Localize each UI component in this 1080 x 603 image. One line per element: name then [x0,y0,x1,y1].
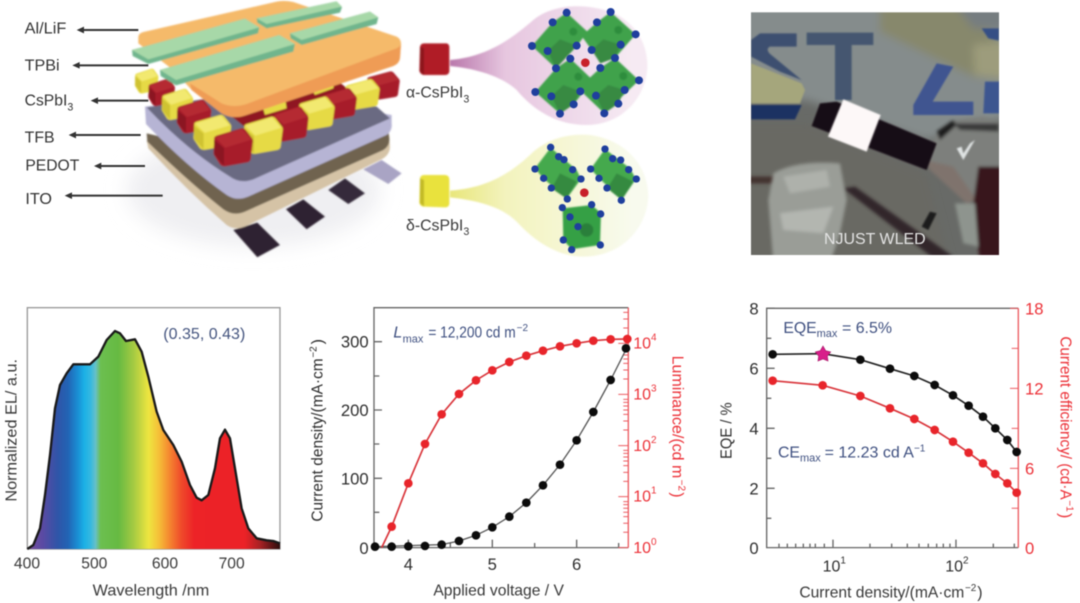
red luminance series [382,335,632,548]
ITO layer [147,135,390,228]
photo dark strip [812,102,937,170]
delta phase bubble [406,135,648,257]
label: ITO: ITO [25,191,52,208]
label: delta CsPbI3: δ-CsPbI [406,217,463,234]
right tick labels: 10 [633,387,651,404]
photo label: NJUST WLED [824,231,926,248]
x tick labels: 6 [572,555,581,574]
ticks [374,342,619,548]
right tick labels: 12 [1025,379,1043,398]
right tick labels: 3 [651,384,657,395]
annotation CEmax: max [800,452,821,464]
coordinates label: (0.35, 0.43) [163,326,245,343]
left tick labels [341,333,369,558]
left tick labels: 2 [749,480,759,499]
TFB layer [145,93,392,199]
annotation CEmax [778,444,926,464]
label: CsPbI3: CsPbI [25,93,67,110]
x tick labels: 600 [152,555,178,572]
x tick labels: 700 [219,555,245,572]
x tick labels: 10 [945,559,963,576]
photo dark cable lines [747,177,953,263]
delta center atom [580,188,589,197]
annotation CEmax: CE [778,444,800,461]
x tick labels: 1 [840,556,846,567]
x tick labels [823,556,969,576]
x axis title: Current density/(mA·cm [799,584,964,601]
photo glowing pixel [828,99,881,152]
left tick labels [749,300,759,558]
right axis title: ) [1057,513,1074,518]
red CE series [768,376,1021,497]
x tick labels [14,555,245,572]
Al/LiF electrode [138,1,401,117]
TPBi strips [132,1,378,85]
alpha octahedra [532,12,639,114]
left tick labels: 0 [359,539,369,558]
delta cube [419,175,449,207]
star marker at EQE max [815,346,831,361]
right tick labels: 10 [633,489,651,506]
label: Al/LiF: Al/LiF [25,21,67,38]
right axis title: −1 [1064,500,1075,512]
right tick labels: 4 [651,332,657,343]
PEDOT layer [147,130,389,214]
subscripts [463,93,469,238]
label: TFB [25,130,141,147]
right tick labels [1025,300,1043,558]
alpha phase bubble [406,6,647,125]
annotation CEmax: −1 [914,444,926,455]
layer labels with arrows [25,21,163,208]
J-V-L chart [309,308,687,600]
label: PEDOT [25,158,145,175]
label: TPBi: TPBi [25,57,60,74]
black current density series [371,344,630,551]
left tick labels: 0 [749,539,759,558]
spectrum chart [4,308,280,600]
spectrum curve [27,331,280,549]
x axis title: Wavelength /nm [93,583,209,600]
annotation Lmax: = 12,200 cd m [428,324,516,341]
x tick labels: 4 [404,555,413,574]
left tick labels: 200 [341,401,369,420]
annotation Lmax: −2 [517,323,528,334]
subscripts: 3 [463,226,469,238]
alpha atoms [528,8,643,118]
label: CsPbI3: 3 [67,101,73,113]
right axis title: Current efficiency/ (cd·A [1057,336,1074,500]
x axis title: Applied voltage / V [433,583,564,600]
annotation CEmax: = 12.23 cd A [825,444,914,461]
left tick labels: 100 [341,469,369,488]
ITO stripes [233,160,402,257]
right tick labels: 2 [651,435,657,446]
x tick labels: 500 [81,555,108,572]
layer stack [132,1,402,257]
axes [374,308,628,548]
annotation EQEmax: max [817,328,838,340]
alpha center atom [581,58,590,67]
annotation EQEmax: = 6.5% [842,320,892,337]
right tick labels: 10 [633,540,651,557]
left axis title: ) [310,339,327,344]
photo cable shadow [922,212,937,230]
label: PEDOT: PEDOT [25,158,80,175]
photo background tones [733,0,1017,277]
delta octahedra [535,148,636,249]
right tick labels [633,332,657,557]
left axis title: EQE / % [718,402,735,459]
left tick labels: 8 [749,300,759,319]
right tick labels: 6 [1025,459,1034,478]
right axis title: Luminance/(cd m [669,356,686,478]
ticks [767,308,1014,548]
black EQE series [768,350,1021,456]
right tick labels: 18 [1025,300,1043,319]
EQE chart [718,300,1075,601]
right axis title: −2 [676,480,687,491]
photo of WLED device [733,0,1017,277]
right axis title: ) [669,492,686,498]
left tick labels: 300 [341,333,369,352]
soft shadow under device [127,133,380,247]
right tick labels: 0 [1025,539,1034,558]
x tick labels: 2 [963,556,969,567]
right tick labels: 1 [651,486,657,497]
x axis title: ) [977,584,983,601]
label: TPBi [25,57,148,74]
x tick labels: 5 [488,555,497,574]
axes [767,308,1018,548]
spectrum frame [27,308,280,549]
x axis title: −2 [965,583,977,594]
label: TFB: TFB [25,130,55,147]
y axis title: Normalized EL/ a.u. [4,359,21,502]
photo foil highlight [957,140,975,160]
right tick labels: 0 [651,537,657,548]
annotation EQEmax: EQE [783,320,817,337]
annotation EQEmax [783,320,892,340]
crystal structures [406,6,648,257]
label: CsPbI3 [25,93,148,113]
left axis title: −2 [309,346,320,358]
left axis title: Current density/(mA·cm [310,358,327,522]
right tick labels: 10 [633,438,651,455]
subscripts: 3 [463,93,469,105]
x tick labels [404,555,581,574]
right tick labels: 10 [633,335,651,352]
photo blue letters [751,28,1000,119]
left tick labels: 6 [749,360,759,379]
x tick labels: 10 [823,559,841,576]
alpha cube [419,43,449,75]
label: Al/LiF [25,21,138,38]
left tick labels: 4 [749,420,759,439]
photo foil electrodes [768,117,1007,263]
delta atoms [531,144,640,253]
label: alpha CsPbI3: α-CsPbI [406,85,463,102]
device stack illustration [25,1,402,257]
annotation Lmax: L [393,324,402,341]
label: ITO [25,191,163,208]
annotation Lmax [393,323,528,345]
x tick labels: 400 [14,555,40,572]
annotation Lmax: max [403,333,424,345]
CsPbI3 cubes [135,69,400,166]
